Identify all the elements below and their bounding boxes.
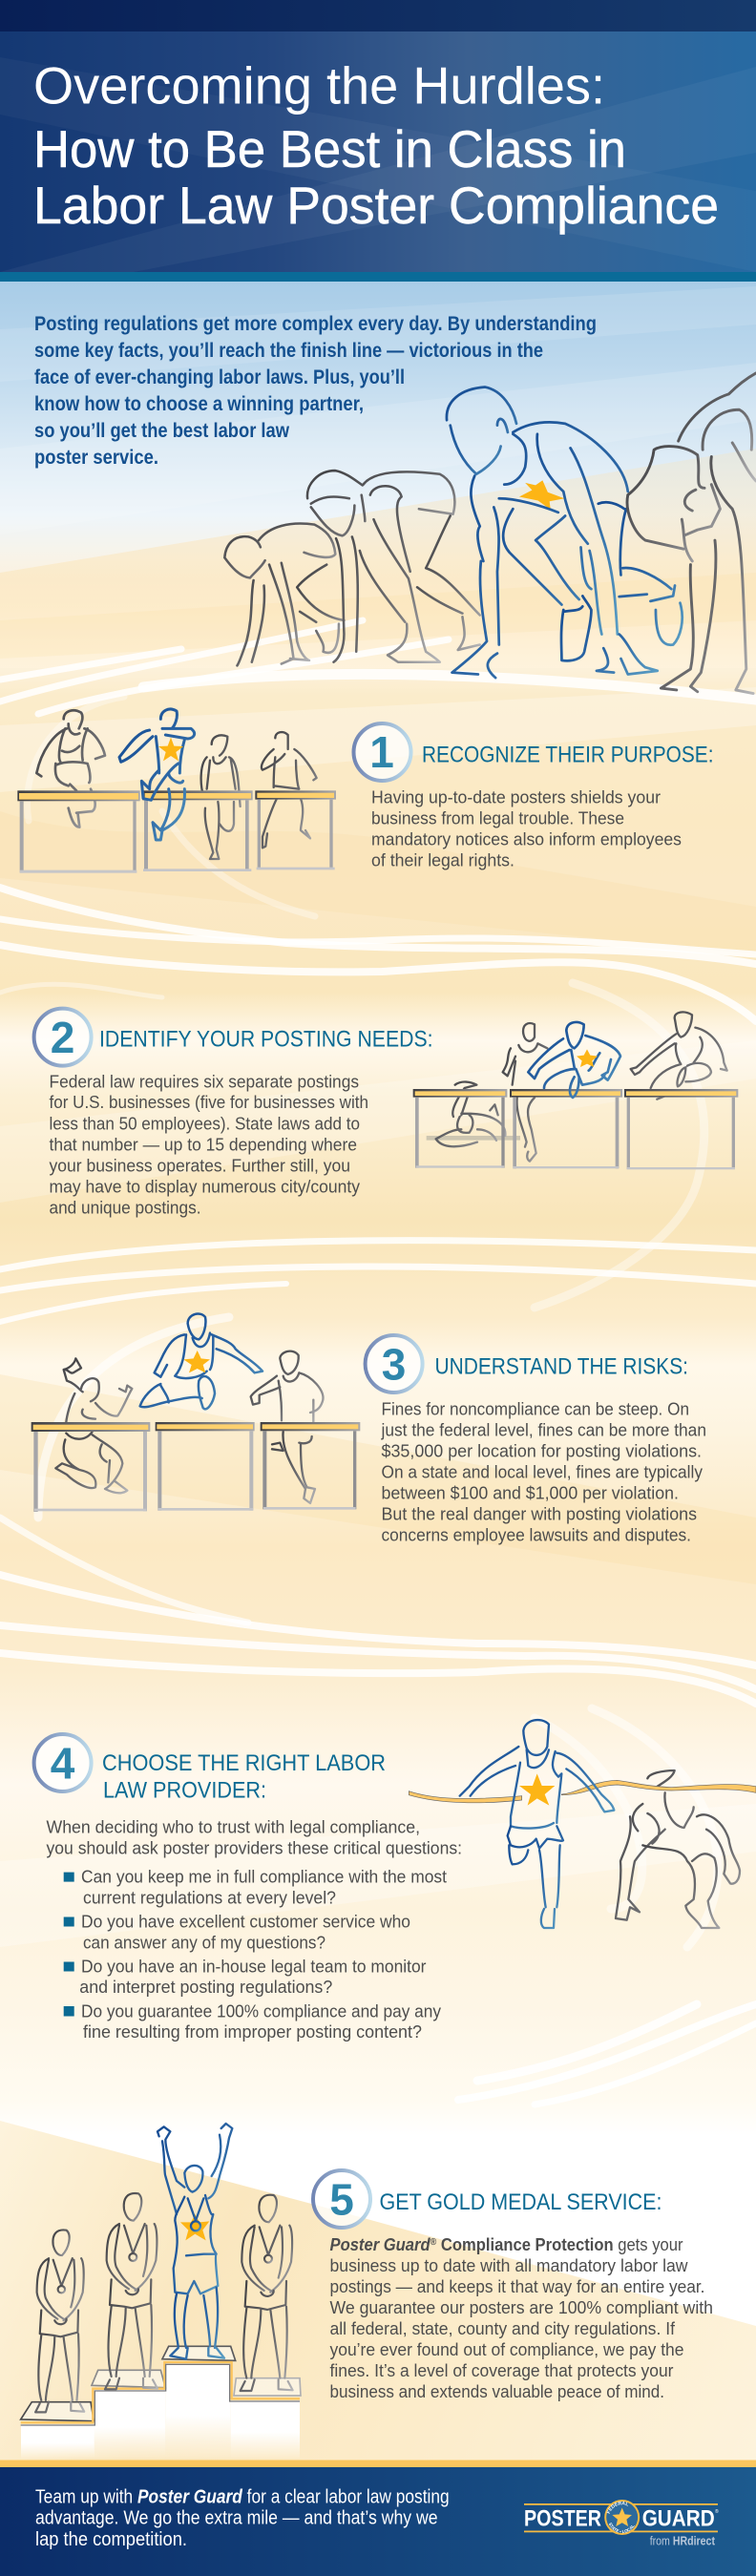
logo: Poster Guard: ® (715, 2508, 719, 2515)
section 3: body text: concerns employee lawsuits and disputes. (382, 1524, 691, 1544)
section 2: body text: less than 50 employees). State laws add to (50, 1113, 360, 1133)
middle gray sprinter (307, 471, 480, 662)
title: How to Be Best in Class in (33, 119, 626, 178)
gray runner left (55, 1358, 132, 1493)
blue hurdler (528, 1022, 620, 1098)
logo: Poster Guard: POSTER (524, 2506, 601, 2532)
intro text: know how to choose a winning partner, (34, 393, 364, 415)
section 2: body text: that number — up to 15 depending where (50, 1134, 357, 1154)
fourth athlete (241, 2195, 293, 2391)
logo seal: FEDERAL (607, 2501, 628, 2514)
silver athlete (105, 2193, 158, 2389)
section 3: body text: between $100 and $1,000 per violation. (382, 1483, 679, 1502)
logo seal: STATE • LOCAL (609, 2523, 635, 2533)
logo: Poster Guard (524, 2500, 719, 2548)
star (519, 480, 564, 510)
section 4: heading: CHOOSE THE RIGHT LABOR (102, 1750, 386, 1776)
section 2: body text: and unique postings. (50, 1197, 200, 1217)
gray runner (503, 1023, 547, 1162)
section 4: intro text: When deciding who to trust with legal compliance, (46, 1817, 420, 1836)
section 5: body text: business up to date with all mandatory labor law (330, 2255, 688, 2275)
gray runner (201, 735, 241, 859)
star (519, 1773, 555, 1806)
section 1: heading: RECOGNIZE THEIR PURPOSE: (422, 743, 714, 768)
intro text: some key facts, you’ll reach the finish line — victorious in the (34, 340, 543, 362)
section 1: body text (371, 786, 682, 870)
large gray sprinter (627, 373, 756, 694)
section 2: number badge: 2 (51, 1013, 74, 1062)
section 3: body text: $35,000 per location for posting violations. (382, 1440, 702, 1460)
section 3: body text: Fines for noncompliance can be steep. On (382, 1399, 689, 1419)
section 4: question 1: Can you keep me in full compliance with the most (81, 1866, 447, 1886)
section 5: podium illustration (21, 2124, 301, 2459)
section 5: body text (330, 2234, 713, 2401)
footer text: advantage. We go the extra mile — and that’s why we (35, 2507, 438, 2529)
section 4: question 2: can answer any of my questions? (83, 1932, 326, 1953)
section 1: hurdlers illustration (17, 709, 336, 873)
section 4: question 3: Do you have an in-house legal team to monitor (81, 1957, 426, 1976)
section 4: question 4: Do you guarantee 100% compliance and pay any (81, 2000, 442, 2021)
section 3: hurdlers illustration (32, 1314, 360, 1512)
gray hurdler right (631, 1012, 727, 1100)
section 4: number badge: 4 (51, 1739, 75, 1789)
blue winner (158, 2124, 232, 2359)
section 5: body text: fines. It’s a level of coverage that protects your (330, 2360, 674, 2380)
section 4: question 3: and interpret posting regulations? (79, 1977, 332, 1997)
star (577, 1049, 598, 1067)
section 4: finish line illustration (409, 1720, 756, 1928)
intro text: poster service. (34, 447, 158, 469)
section 2: body text (50, 1071, 368, 1217)
section 3: number badge: 3 (382, 1340, 406, 1390)
section 5: body text: business and extends valuable peace of mind. (330, 2381, 664, 2401)
section 5: number badge: 5 (329, 2174, 354, 2224)
section 4: question 1: current regulations at every level? (83, 1888, 336, 1908)
section 5: body text: gets your (619, 2234, 691, 2254)
section 3: body text: But the real danger with posting violations (382, 1503, 697, 1523)
hurdles (32, 1422, 360, 1512)
section 1: body text: mandatory notices also inform employees (371, 828, 682, 848)
section 1: body text: of their legal rights. (371, 850, 514, 870)
hurdles (17, 790, 336, 873)
section 4: intro text (46, 1817, 462, 1857)
gray hurdler left (36, 710, 105, 827)
footer text: Team up with Poster Guard for a clear labor law posting (35, 2485, 450, 2508)
podium blocks (21, 2346, 301, 2459)
white track streaks (0, 620, 756, 2105)
blue hurdler (119, 709, 195, 840)
section 2: body text: your business operates. Further still, you (50, 1155, 350, 1175)
section 4: question 3 (64, 1957, 426, 1997)
gray fallen runner (436, 1082, 505, 1146)
section 2: body text: Federal law requires six separate postings (50, 1071, 359, 1091)
section 3: number badge (366, 1335, 423, 1393)
section 3: body text: just the federal level, fines can be more than (381, 1420, 706, 1439)
section 5: body text: all federal, state, county and city regulations. If (330, 2318, 676, 2338)
section 5: body text: postings — and keeps it that way for an entire year. (330, 2276, 704, 2296)
section 2: body text: may have to display numerous city/county (50, 1176, 361, 1197)
section 5: body text: Poster Guard (330, 2234, 430, 2254)
star (183, 1351, 210, 1372)
section 2: body text: for U.S. businesses (five for businesses with (50, 1092, 368, 1112)
title: Overcoming the Hurdles: (33, 55, 605, 115)
star (180, 2214, 209, 2240)
logo: Poster Guard: GUARD (642, 2506, 715, 2532)
finish tape (409, 1780, 756, 1803)
gray runner right (262, 732, 317, 848)
small gray sprinter (224, 524, 344, 665)
footer text: lap the competition. (35, 2528, 187, 2550)
section 1: number badge (353, 723, 410, 781)
bronze athlete (35, 2230, 84, 2412)
section 4: heading: LAW PROVIDER: (103, 1777, 266, 1804)
title: Labor Law Poster Compliance (33, 176, 719, 235)
section 5: heading: GET GOLD MEDAL SERVICE: (380, 2189, 662, 2215)
footer band (0, 2461, 756, 2576)
gray runner right (251, 1351, 323, 1503)
from HRdirect: from HRdirect (650, 2534, 716, 2548)
section 1: body text: business from legal trouble. These (371, 807, 624, 827)
section 4: question 2: Do you have excellent customer service who (81, 1912, 410, 1932)
intro text: so you’ll get the best labor law (34, 420, 290, 442)
section 5: body text: ® (430, 2237, 437, 2248)
blue runner (460, 1720, 614, 1928)
section 4: question 4 (64, 2000, 442, 2042)
section 4: question 4: fine resulting from improper posting content? (83, 2021, 422, 2042)
section 3: body text: On a state and local level, fines are typically (382, 1462, 704, 1482)
section 1: number badge: 1 (369, 727, 394, 777)
section 3: body text (381, 1399, 706, 1544)
section 1: body text: Having up-to-date posters shields your (371, 786, 661, 807)
blue hurdler (140, 1314, 262, 1409)
gray runner (616, 1770, 740, 1928)
title (33, 55, 719, 235)
fallen hurdle rail (427, 1136, 520, 1141)
intro text: face of ever-changing labor laws. Plus, you’ll (34, 367, 405, 388)
section 5: body text: We guarantee our posters are 100% compliant with (330, 2297, 713, 2317)
hurdles (413, 1089, 738, 1169)
footer text (35, 2485, 450, 2550)
logo seal (604, 2500, 640, 2535)
section 4: question 2 (64, 1912, 410, 1953)
section 4: number badge (34, 1734, 92, 1791)
section 4: intro text: you should ask poster providers these critical questions: (46, 1837, 462, 1857)
section 4: heading (102, 1750, 386, 1804)
section 5: number badge (313, 2170, 370, 2228)
header band (0, 0, 756, 282)
section 2: hurdlers illustration (413, 1012, 738, 1169)
blue sprinter (447, 387, 682, 678)
section 3: heading: UNDERSTAND THE RISKS: (435, 1353, 688, 1379)
intro text: Posting regulations get more complex every day. By understanding (34, 313, 597, 335)
section 4: question 1 (64, 1866, 447, 1908)
section 5: body text: Compliance Protection (436, 2234, 614, 2254)
section 2: heading: IDENTIFY YOUR POSTING NEEDS: (99, 1026, 433, 1052)
section 2: number badge (34, 1009, 92, 1066)
illustration: sprinters in starting blocks (224, 373, 756, 694)
section 5: body text: you’re ever found out of compliance, we pay the (330, 2339, 683, 2359)
intro text (34, 313, 597, 469)
star (158, 738, 183, 761)
